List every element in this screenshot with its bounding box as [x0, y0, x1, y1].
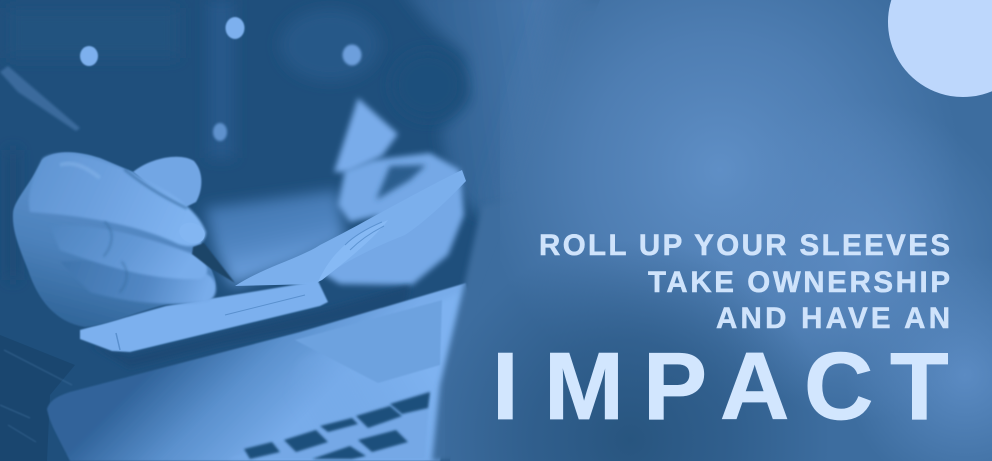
- middle finger: [50, 225, 207, 279]
- notebook: [80, 170, 466, 368]
- laptop: [47, 283, 470, 461]
- impact word: IMPACT: [492, 333, 949, 440]
- shirt buttons: [80, 17, 362, 141]
- thumb: [133, 157, 201, 210]
- writing hand: [13, 152, 216, 327]
- line 1: ROLL UP YOUR SLEEVES: [539, 229, 950, 262]
- soft lower edge: [432, 180, 992, 461]
- keyboard: [228, 390, 430, 459]
- trackpad: [295, 300, 442, 383]
- table: [0, 335, 75, 461]
- fingernail: [177, 219, 207, 247]
- panel base: [450, 0, 992, 461]
- blurred laptop screen panel: [432, 0, 992, 461]
- panel highlight: [500, 0, 992, 461]
- sleeve: [400, 0, 590, 215]
- ring finger: [60, 260, 216, 304]
- shadow: [90, 285, 410, 368]
- shirt: [8, 0, 380, 280]
- desk surface: [205, 190, 345, 286]
- silhouette: [13, 152, 215, 327]
- finger creases: [104, 170, 186, 292]
- sleeve shadow: [392, 51, 464, 119]
- soft upper edge: [495, 0, 640, 210]
- headline: [492, 229, 950, 440]
- panel shadow: [445, 240, 830, 461]
- open pages: [235, 170, 466, 286]
- index finger: [29, 153, 206, 246]
- pen in background: [0, 66, 80, 131]
- supporting hand: [320, 153, 464, 285]
- line 2: TAKE OWNERSHIP: [648, 266, 950, 299]
- knuckle highlights: [60, 164, 100, 178]
- decorative circle: [888, 0, 992, 97]
- lower cover: [80, 281, 328, 352]
- line 3: AND HAVE AN: [716, 302, 950, 335]
- pen: [192, 243, 235, 283]
- collar: [334, 98, 398, 172]
